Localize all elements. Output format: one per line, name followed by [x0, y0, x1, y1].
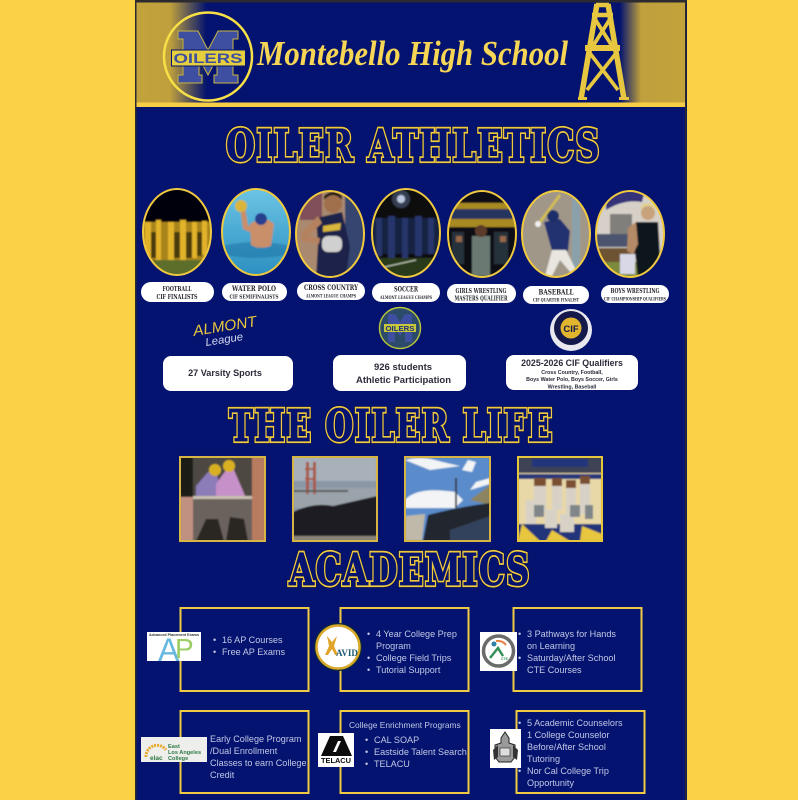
heading: academics: ACADEMICS: [288, 545, 531, 596]
stat card: athletic participation: 926 students: [374, 362, 432, 373]
logo: cte: CTE: [501, 657, 509, 661]
logo: elac: [141, 737, 207, 762]
list: College Enrichment Programs: [349, 720, 461, 730]
list: TELACU: [374, 759, 410, 769]
panel: cte pathways: [480, 608, 642, 691]
photo: dance team: [518, 457, 602, 541]
label: soccer: [372, 283, 440, 302]
label: baseball: CIF QUARTER FINALIST: [533, 298, 579, 304]
heading: the oiler life: THE OILER LIFE: [229, 401, 554, 452]
list: •: [518, 653, 521, 663]
heading: oiler athletics: OILER ATHLETICS: [226, 121, 601, 172]
list: Tutorial Support: [376, 665, 441, 675]
list: •: [365, 735, 368, 745]
oiler life photos: [180, 457, 602, 541]
stat card: athletic participation: Athletic Participation: [356, 375, 451, 386]
list: 4 Year College Prep: [376, 629, 457, 639]
photo: golden gate bridge: [293, 457, 377, 541]
photo: costumes: [180, 457, 265, 541]
label: boys wrestling: CIF CHAMPIONSHIP QUALIFIERS: [604, 296, 666, 302]
list: Opportunity: [527, 778, 574, 788]
text: Classes to earn College: [210, 758, 307, 768]
logo: elac: Los Angeles: [168, 750, 201, 756]
heading: oiler athletics: OILER ATHLETICS: [226, 121, 601, 172]
sports photo row: [142, 188, 665, 278]
list: •: [518, 766, 521, 776]
label: baseball: [523, 286, 589, 304]
header banner: [136, 2, 685, 107]
photo: stadium crowd: [405, 457, 490, 541]
list: 5 Academic Counselors: [527, 718, 623, 728]
list: •: [365, 747, 368, 757]
logo: almont league: [191, 313, 260, 349]
logo: ap: P: [175, 633, 194, 664]
list: •: [518, 629, 521, 639]
list: •: [213, 635, 216, 645]
photo: boys wrestling: [595, 190, 665, 278]
list: •: [367, 665, 370, 675]
school name: Montebello High School: [256, 34, 568, 73]
photo: soccer: [371, 188, 441, 278]
logo: school seal: [490, 729, 521, 768]
label: water polo: WATER POLO: [231, 284, 276, 293]
stat card: athletic participation: [333, 355, 466, 391]
list: •: [365, 759, 368, 769]
text: Credit: [210, 770, 235, 780]
list: 1 College Counselor: [527, 730, 609, 740]
heading: academics: ACADEMICS: [288, 545, 531, 596]
school logo: [164, 12, 252, 100]
list: Before/After School: [527, 742, 606, 752]
stat card: cif qualifiers: Boys Water Polo, Boys Soccer, Girls: [526, 377, 618, 383]
sports labels: [141, 282, 669, 304]
list: •: [367, 629, 370, 639]
label: cross country: [297, 282, 365, 300]
label: water polo: CIF SEMIFINALISTS: [230, 294, 279, 300]
logo: telacu: [318, 733, 354, 767]
panel: ap courses: [147, 608, 308, 691]
list: 3 Pathways for Hands: [527, 629, 616, 639]
list: CAL SOAP: [374, 735, 419, 745]
list: Tutoring: [527, 754, 560, 764]
poster panel: [135, 0, 687, 800]
photo: baseball: [521, 190, 591, 278]
stat card: cif qualifiers: Wrestling, Baseball: [548, 384, 597, 390]
logo: almont league: League: [205, 331, 244, 349]
label: water polo: [222, 283, 287, 301]
list: Program: [376, 641, 411, 651]
photo: girls wrestling: [447, 190, 517, 278]
photo: football: [142, 188, 212, 276]
logo: oilers badge: OILERS: [386, 326, 415, 333]
logo: elac: elac: [150, 755, 163, 762]
photo: cross country: [295, 190, 365, 278]
logo: ap: A: [158, 632, 180, 668]
logo: avid: [314, 623, 362, 671]
list: CTE Courses: [527, 665, 582, 675]
stat card: cif qualifiers: [506, 355, 638, 390]
logo: avid: AVID: [336, 648, 358, 658]
logo: telacu: TELACU: [321, 758, 351, 765]
logo: ap: Advanced Placement Exams: [149, 633, 199, 637]
icon: oil derrick: [578, 4, 629, 99]
stat card: varsity sports: 27 Varsity Sports: [188, 368, 262, 378]
label: football: [141, 282, 214, 302]
label: cross country: ALMONT LEAGUE CHAMPS: [305, 294, 356, 300]
stat card: varsity sports: [163, 356, 293, 391]
list: 16 AP Courses: [222, 635, 283, 645]
label: girls wrestling: [447, 284, 516, 303]
list: Nor Cal College Trip: [527, 766, 609, 776]
logo: cte: [480, 632, 517, 671]
label: cross country: CROSS COUNTRY: [304, 283, 358, 292]
logo: elac: East: [168, 744, 180, 750]
heading: the oiler life: THE OILER LIFE: [229, 401, 554, 452]
text: /Dual Enrollment: [210, 746, 278, 756]
logo: oilers badge: [380, 308, 420, 348]
panel: enrichment programs: [318, 711, 468, 793]
panel: early college: [141, 711, 308, 793]
label: girls wrestling: GIRLS WRESTLING: [456, 287, 507, 295]
heading: the oiler life: THE OILER LIFE: [229, 401, 554, 452]
label: boys wrestling: BOYS WRESTLING: [610, 287, 660, 295]
logo: cif seal: CIF: [563, 324, 579, 335]
label: football: CIF FINALISTS: [156, 293, 198, 301]
label: soccer: ALMONT LEAGUE CHAMPS: [379, 295, 432, 301]
list: on Learning: [527, 641, 575, 651]
list: •: [367, 653, 370, 663]
panel: counseling: [490, 711, 644, 793]
heading: oiler athletics: OILER ATHLETICS: [226, 121, 601, 172]
list: Saturday/After School: [527, 653, 615, 663]
list: Free AP Exams: [222, 647, 285, 657]
label: soccer: SOCCER: [394, 284, 419, 294]
label: football: FOOTBALL: [162, 285, 192, 293]
logo: almont league: ALMONT: [191, 313, 260, 340]
heading: academics: ACADEMICS: [288, 545, 531, 596]
list: College Field Trips: [376, 653, 452, 663]
text: Early College Program: [210, 734, 301, 744]
school logo: OILERS: [174, 50, 242, 66]
list: •: [518, 718, 521, 728]
list: Eastside Talent Search: [374, 747, 467, 757]
label: boys wrestling: [601, 285, 669, 303]
stat card: cif qualifiers: 2025-2026 CIF Qualifiers: [521, 358, 623, 368]
logo: elac: College: [168, 756, 188, 762]
label: baseball: BASEBALL: [538, 288, 574, 296]
logo: cif seal: [550, 309, 592, 351]
panel: avid: [314, 608, 468, 691]
photo: water polo: [221, 188, 291, 276]
label: girls wrestling: MASTERS QUALIFIER: [454, 296, 508, 302]
list: •: [213, 647, 216, 657]
stat card: cif qualifiers: Cross Country, Football,: [541, 370, 603, 376]
logo: ap: [147, 632, 201, 668]
